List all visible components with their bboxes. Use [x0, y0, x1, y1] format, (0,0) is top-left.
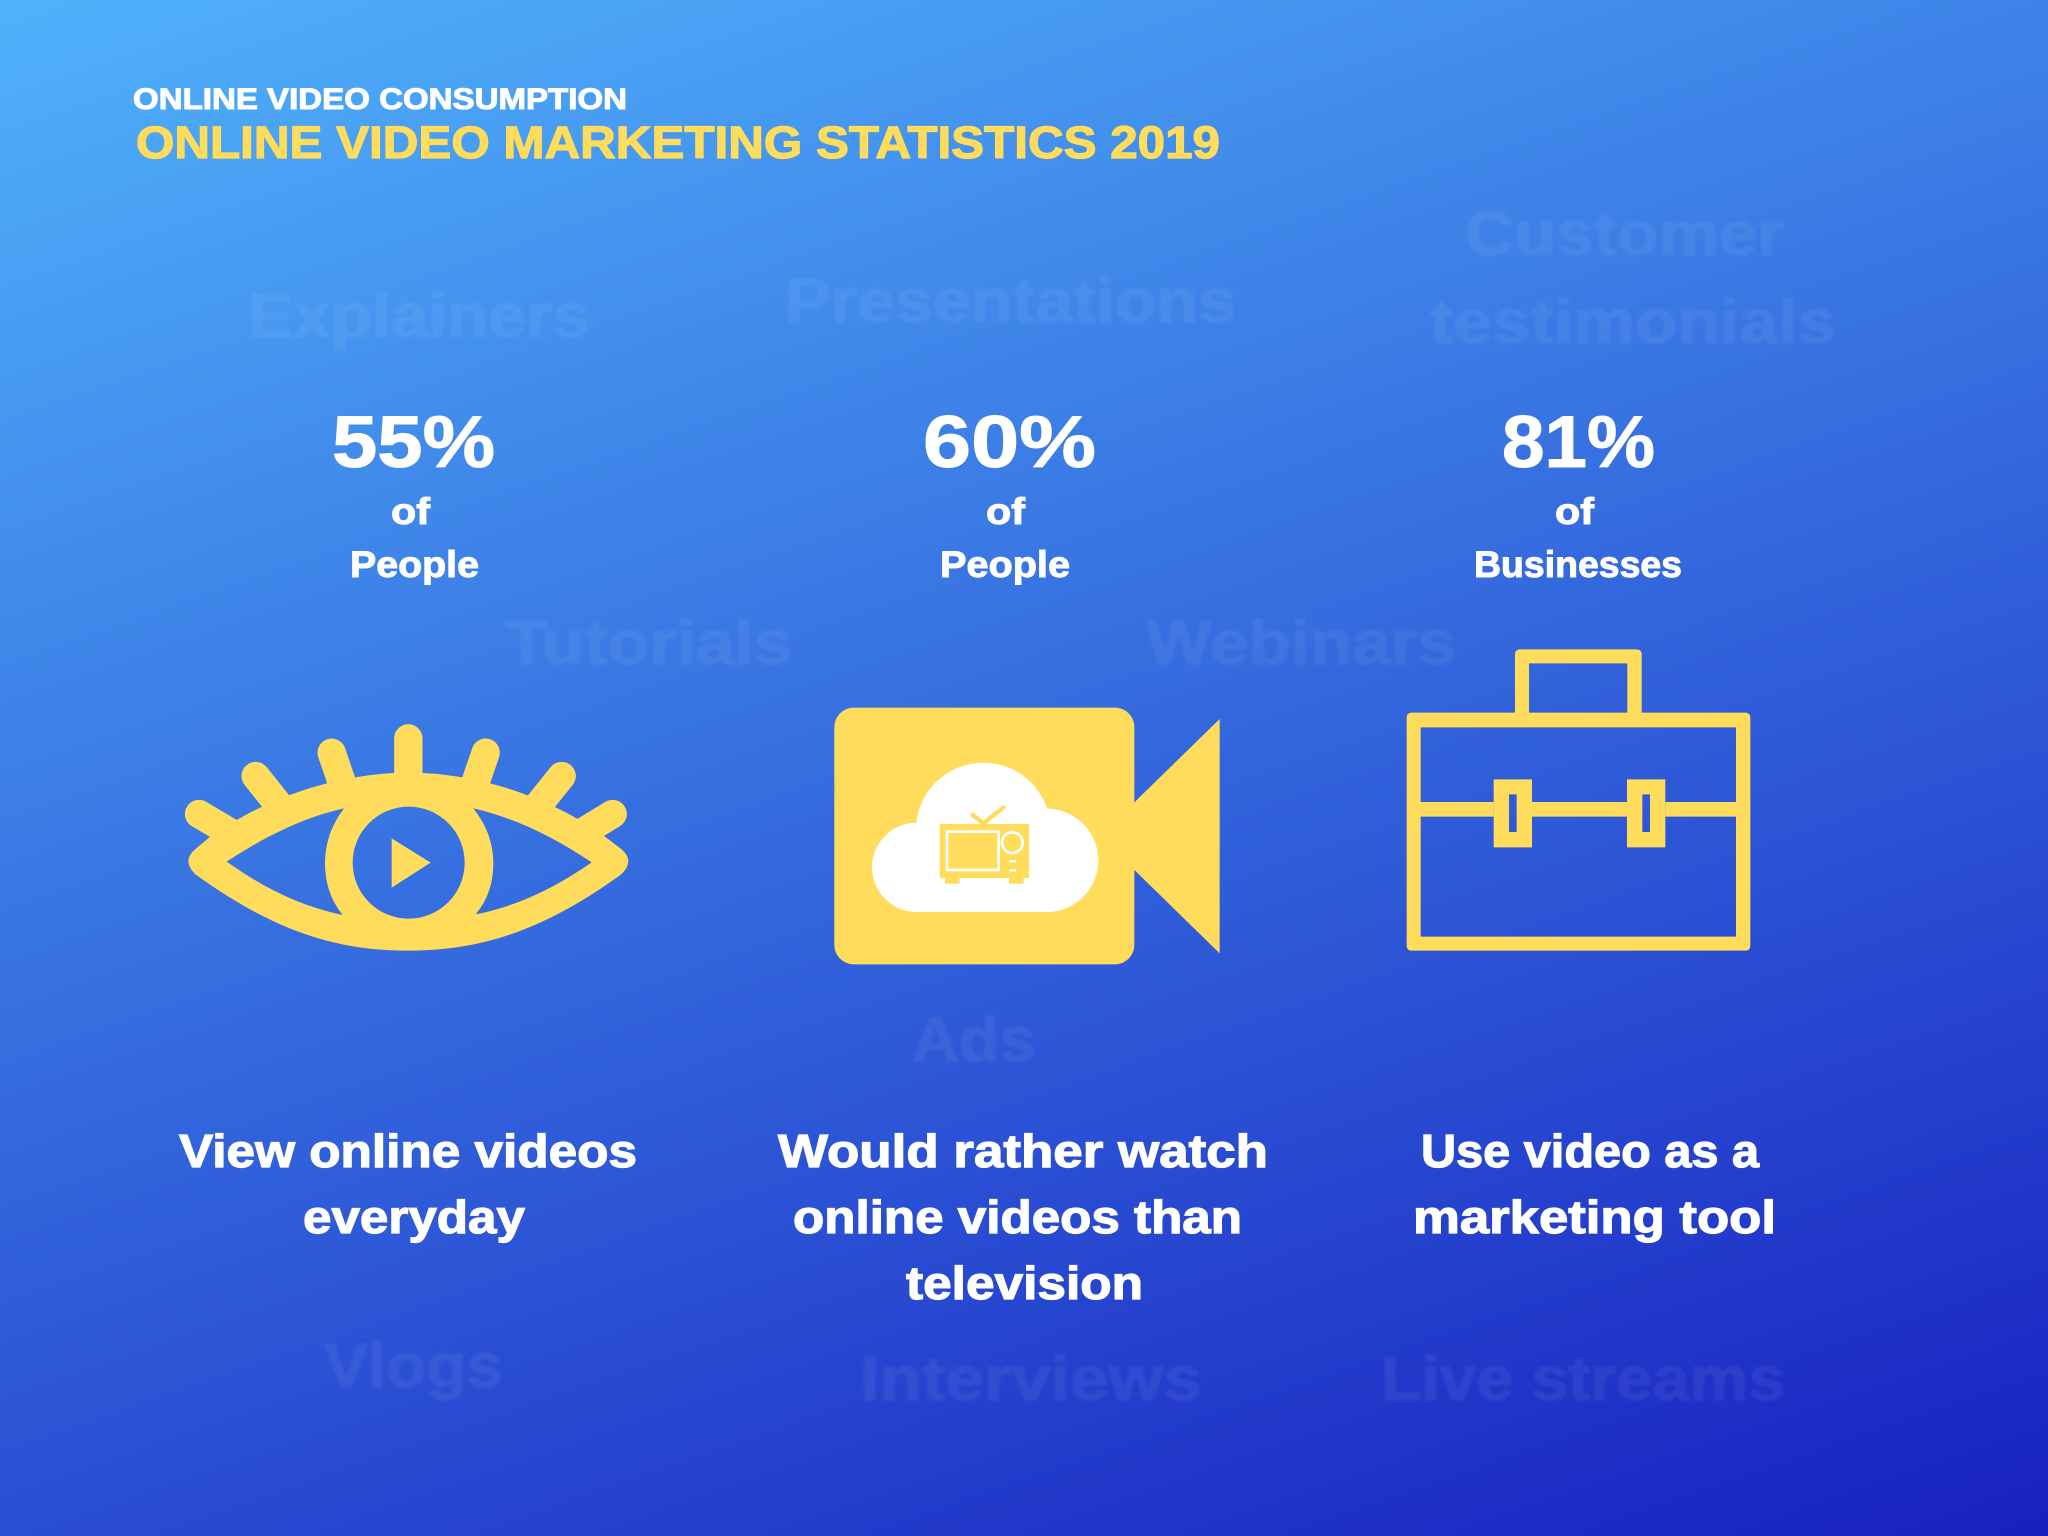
icon: video camera with cloud and tv [834, 708, 1220, 964]
description: use video as a marketing tool: marketing tool [1413, 1191, 1776, 1243]
stat: 81% of businesses: of [1555, 491, 1595, 532]
background words: Webinars [1146, 609, 1456, 678]
description: view online videos [179, 1125, 637, 1243]
stat: 55% of people: 55% [332, 402, 495, 483]
stat: 55% of people: of [391, 491, 431, 532]
stat: 60% of people: of [986, 491, 1026, 532]
background words: Tutorials [505, 609, 792, 678]
background words: Explainers [248, 282, 590, 351]
description: view online videos: everyday [303, 1191, 525, 1243]
description: view online videos: View online videos [179, 1125, 637, 1177]
stat: 81% of businesses [1474, 402, 1682, 585]
icon: briefcase [1407, 649, 1750, 951]
description: use video as a marketing tool [1413, 1125, 1776, 1243]
background words [248, 200, 1836, 1414]
description: use video as a marketing tool: Use video as a [1421, 1125, 1759, 1177]
stat: 60% of people: People [940, 544, 1070, 585]
kicker heading: ONLINE VIDEO CONSUMPTION [133, 83, 627, 116]
stat: 81% of businesses: 81% [1502, 402, 1655, 483]
stat: 55% of people [332, 402, 495, 585]
description: would rather watch: Would rather watch [778, 1125, 1268, 1177]
stat: 60% of people [923, 402, 1096, 585]
main title: ONLINE VIDEO MARKETING STATISTICS 2019 [136, 117, 1220, 168]
stat: 60% of people: 60% [923, 402, 1096, 483]
background words: Ads [912, 1006, 1036, 1075]
description: would rather watch: television [906, 1257, 1143, 1309]
background words: testimonials [1430, 288, 1836, 357]
background words: Vlogs [324, 1332, 503, 1401]
background words: Live streams [1381, 1345, 1785, 1414]
background words: Presentations [785, 267, 1236, 336]
background words: Customer [1465, 200, 1784, 269]
stat: 81% of businesses: Businesses [1474, 544, 1682, 585]
description: would rather watch [778, 1125, 1268, 1309]
icon: eye with play button [185, 724, 628, 951]
stat: 55% of people: People [350, 544, 479, 585]
background words: Interviews [860, 1345, 1202, 1414]
description: would rather watch: online videos than [793, 1191, 1242, 1243]
